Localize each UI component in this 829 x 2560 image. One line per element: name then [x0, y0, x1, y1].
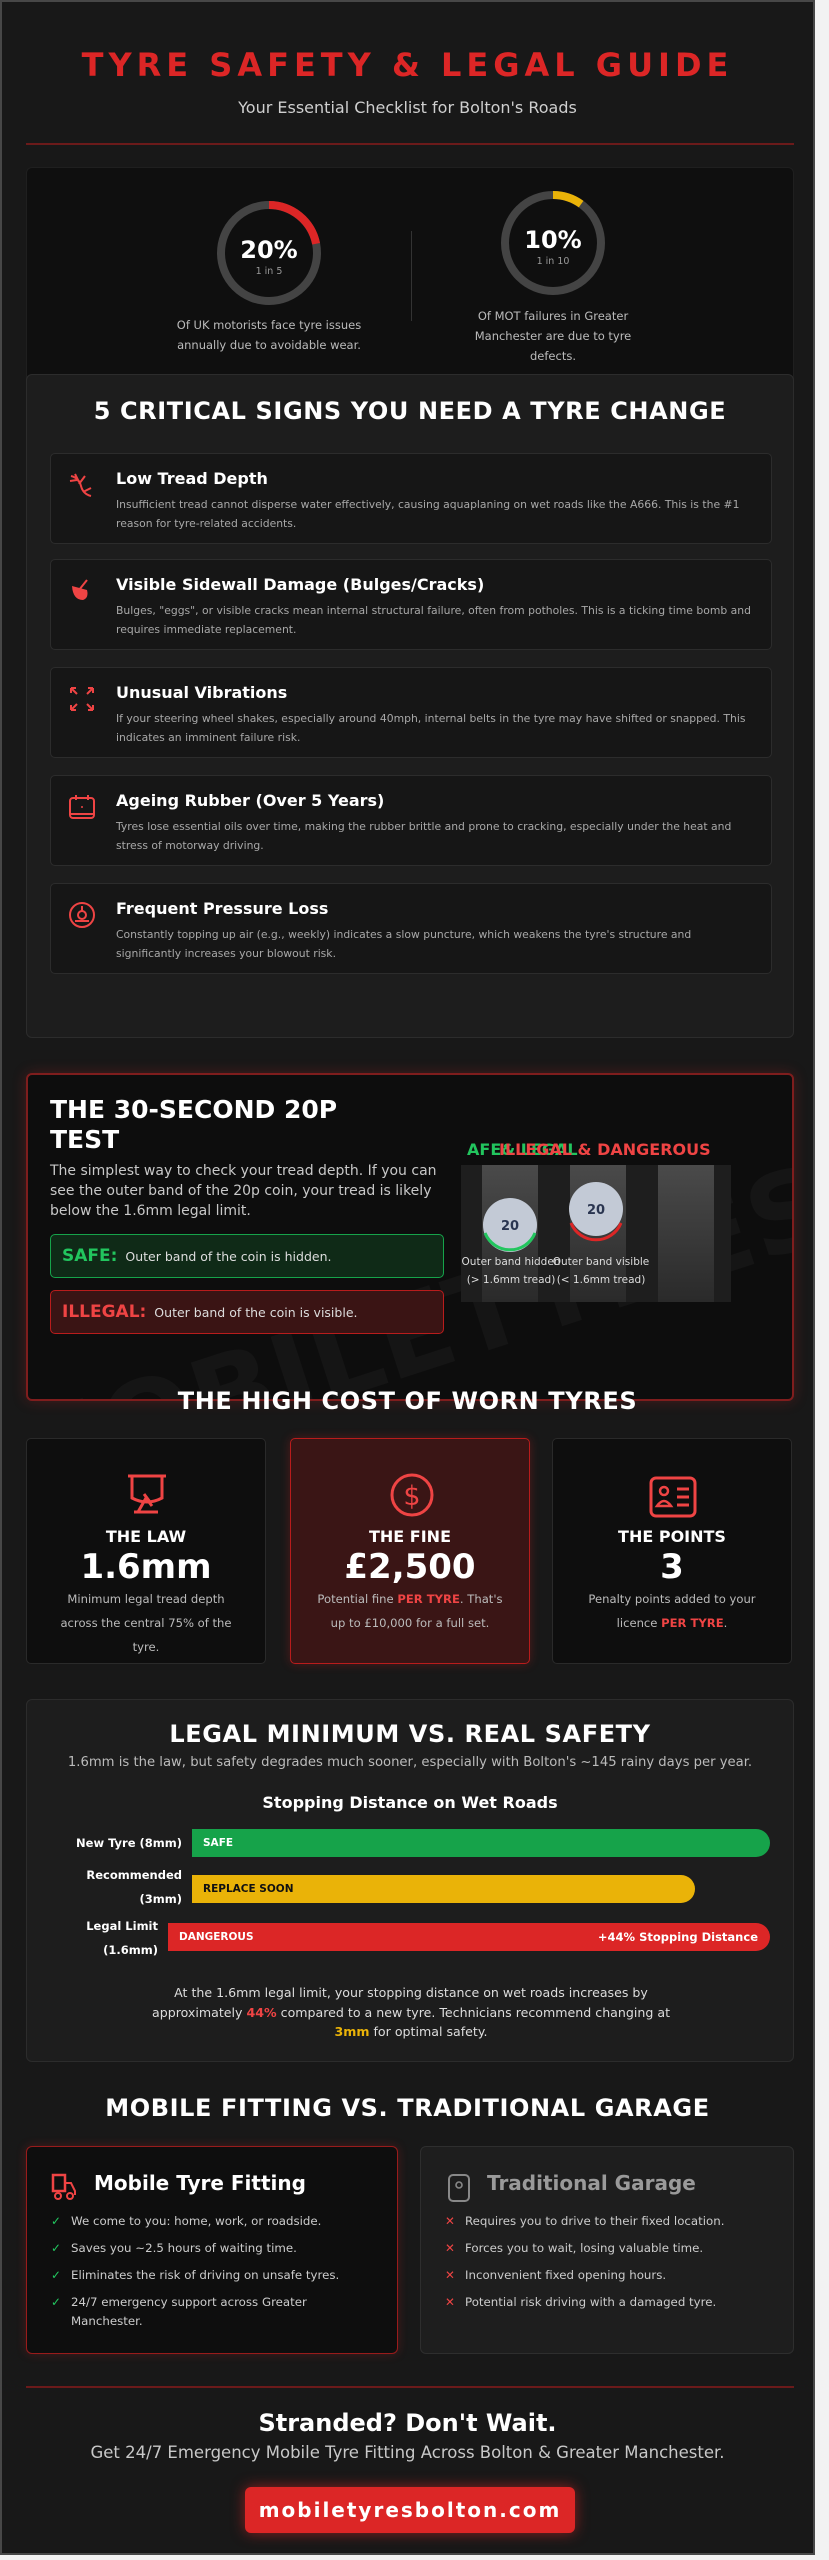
- list: benefits: ✓: [51, 2295, 61, 2309]
- bar chart: DANGEROUS: [179, 1931, 254, 1943]
- safe box: [50, 1234, 444, 1278]
- item: ageing: [50, 775, 772, 866]
- card: the points: 3: [660, 1547, 684, 1587]
- list: drawbacks: ✕: [445, 2241, 455, 2255]
- bar chart: (3mm): [140, 1892, 182, 1906]
- panel: mobile fitting: Mobile Tyre Fitting: [94, 2171, 306, 2195]
- item: low tread: Low Tread Depth: [116, 469, 268, 488]
- icon: tread: [70, 474, 92, 497]
- icon: licence: [650, 1476, 696, 1518]
- card: the law: THE LAW: [106, 1527, 186, 1546]
- card: the law: [26, 1438, 266, 1664]
- heading: mobile vs garage: MOBILE FITTING VS. TRADITIONAL GARAGE: [105, 2094, 710, 2122]
- item: low tread: [50, 453, 772, 544]
- bar chart: New Tyre (8mm): [76, 1836, 182, 1850]
- coin diagram: Outer band hidden (> 1.6mm tread): [462, 1256, 560, 1286]
- icon: truck: [52, 2174, 76, 2200]
- paragraph: The simplest way to check your tread depth. If you can see the outer band of the 20p coin, your tread is likely below the 1.6mm legal limit.: [50, 1163, 437, 1219]
- icon: gauge: [69, 902, 95, 928]
- bar chart: [76, 1829, 770, 1957]
- coin diagram: [461, 1140, 731, 1302]
- card: the fine: Potential fine PER TYRE. That's up to £10,000 for a full set.: [317, 1592, 503, 1630]
- icon: bulge: [72, 579, 88, 600]
- cta button: [245, 2487, 575, 2533]
- panel: legal vs safety: [26, 1699, 794, 2062]
- item: vibrations: Unusual Vibrations: [116, 683, 287, 702]
- list: benefits: ✓: [51, 2214, 61, 2228]
- coin diagram: Outer band visible (< 1.6mm tread): [553, 1256, 649, 1286]
- item: sidewall: Bulges, "eggs", or visible cracks mean internal structural failure, often from potholes. This is a ticking time bomb and requires immediate replacement.: [116, 604, 751, 636]
- list: drawbacks: ✕: [445, 2268, 455, 2282]
- stat ring: 20%: 1 in 5: [256, 266, 282, 277]
- icon: dollar: [390, 1474, 434, 1516]
- coin diagram: 20: [501, 1219, 519, 1234]
- card: the law: Minimum legal tread depth across the central 75% of the tyre.: [60, 1592, 232, 1654]
- item: low tread: Insufficient tread cannot disperse water effectively, causing aquaplaning on wet roads like the A666. This is the #1 reason for tyre-related accidents.: [116, 498, 739, 530]
- heading: THE 30-SECOND 20P TEST: [50, 1095, 337, 1154]
- stat ring: 10%: [501, 191, 605, 295]
- item: sidewall: [50, 559, 772, 650]
- list: drawbacks: ✕: [445, 2295, 455, 2309]
- subtext: 1.6mm is the law, but safety degrades much sooner, especially with Bolton's ~145 rainy days per year.: [68, 1755, 752, 1770]
- stat caption 2: Of MOT failures in Greater Manchester are due to tyre defects.: [475, 309, 631, 363]
- item: pressure: [50, 883, 772, 974]
- panel: 5 critical signs: [26, 374, 794, 1038]
- heading: 5 CRITICAL SIGNS YOU NEED A TYRE CHANGE: [94, 397, 726, 425]
- stat ring: 20%: 20%: [240, 236, 298, 264]
- item: ageing: Ageing Rubber (Over 5 Years): [116, 791, 384, 810]
- card: the law: 1.6mm: [80, 1547, 212, 1587]
- bar chart: +44% Stopping Distance: [598, 1930, 758, 1944]
- panel: stats: [26, 167, 794, 387]
- card: the fine: £2,500: [344, 1547, 476, 1587]
- icon: arrows: [70, 687, 94, 711]
- cta subtext: Get 24/7 Emergency Mobile Tyre Fitting Across Bolton & Greater Manchester.: [90, 2443, 725, 2462]
- coin diagram: ILLEGAL & DANGEROUS: [499, 1140, 711, 1159]
- item: sidewall: Visible Sidewall Damage (Bulges/Cracks): [116, 575, 484, 594]
- list: benefits: ✓: [51, 2241, 61, 2255]
- card: the points: [552, 1438, 792, 1664]
- coin diagram: AFE& LEGAL: [467, 1140, 578, 1159]
- bar chart: SAFE: [203, 1837, 233, 1849]
- panel: mobile fitting: [26, 2146, 398, 2354]
- list: drawbacks: [445, 2214, 724, 2309]
- conclusion text: At the 1.6mm legal limit, your stopping distance on wet roads increases by approximately 44% compared to a new tyre. Technicians recommend changing at 3mm for optimal safety.: [152, 1985, 670, 2039]
- icon: location: [448, 2174, 470, 2202]
- bar chart: REPLACE SOON: [203, 1883, 294, 1895]
- list: benefits: [51, 2214, 339, 2328]
- heading: LEGAL MINIMUM VS. REAL SAFETY: [169, 1720, 651, 1748]
- illegal box: ILLEGAL: Outer band of the coin is visible.: [62, 1302, 357, 1322]
- cta button: mobiletyresbolton.com: [259, 2498, 561, 2522]
- list: benefits: 24/7 emergency support across Greater Manchester.: [71, 2295, 307, 2328]
- item: vibrations: If your steering wheel shakes, especially around 40mph, internal belts in the tyre may have shifted or snapped. This indicates an imminent failure risk.: [116, 712, 745, 744]
- panel: traditional garage: [420, 2146, 794, 2354]
- subtitle: Your Essential Checklist for Bolton's Roads: [238, 98, 577, 117]
- panel: legal vs safety: (1.6mm): [103, 1943, 158, 1957]
- title: TYRE SAFETY & LEGAL GUIDE: [82, 46, 733, 84]
- icon: calendar: [69, 795, 95, 819]
- list: benefits: Eliminates the risk of driving on unsafe tyres.: [71, 2268, 339, 2282]
- stat ring: 10%: 10%: [524, 226, 582, 254]
- card: the points: Penalty points added to your licence PER TYRE.: [588, 1592, 756, 1630]
- list: drawbacks: Potential risk driving with a damaged tyre.: [465, 2295, 716, 2309]
- item: pressure: Frequent Pressure Loss: [116, 899, 328, 918]
- safe box: SAFE: Outer band of the coin is hidden.: [62, 1246, 331, 1266]
- list: benefits: Saves you ~2.5 hours of waiting time.: [71, 2241, 297, 2255]
- panel: traditional garage: Traditional Garage: [487, 2171, 696, 2195]
- item: ageing: Tyres lose essential oils over time, making the rubber brittle and prone to cracking, especially under the heat and stress of motorway driving.: [116, 820, 731, 852]
- item: vibrations: [50, 667, 772, 758]
- card: the fine: THE FINE: [369, 1527, 451, 1546]
- heading: high cost: THE HIGH COST OF WORN TYRES: [178, 1387, 637, 1415]
- stat caption 1: Of UK motorists face tyre issues annually due to avoidable wear.: [177, 318, 361, 352]
- list: drawbacks: Inconvenient fixed opening hours.: [465, 2268, 666, 2282]
- list: drawbacks: ✕: [445, 2214, 455, 2228]
- chart title: Stopping Distance on Wet Roads: [262, 1793, 558, 1812]
- list: benefits: ✓: [51, 2268, 61, 2282]
- item: pressure: Constantly topping up air (e.g., weekly) indicates a slow puncture, which weakens the tyre's structure and significantly increases your blowout risk.: [116, 928, 691, 960]
- coin diagram: 20: [587, 1203, 605, 1218]
- bar chart: Legal Limit: [86, 1919, 158, 1933]
- list: drawbacks: Requires you to drive to their fixed location.: [465, 2214, 724, 2228]
- icon: dollar: $: [403, 1481, 421, 1512]
- stat ring: 10%: 1 in 10: [537, 256, 569, 267]
- bar chart: Recommended: [86, 1868, 182, 1882]
- cta heading: Stranded? Don't Wait.: [258, 2409, 557, 2437]
- stat ring: 20%: [217, 201, 321, 305]
- card: the fine: [290, 1438, 530, 1664]
- card: the points: THE POINTS: [618, 1527, 726, 1546]
- illegal box: [50, 1290, 444, 1334]
- icon: law: [128, 1474, 166, 1514]
- list: drawbacks: Forces you to wait, losing valuable time.: [465, 2241, 703, 2255]
- list: benefits: We come to you: home, work, or roadside.: [71, 2214, 321, 2228]
